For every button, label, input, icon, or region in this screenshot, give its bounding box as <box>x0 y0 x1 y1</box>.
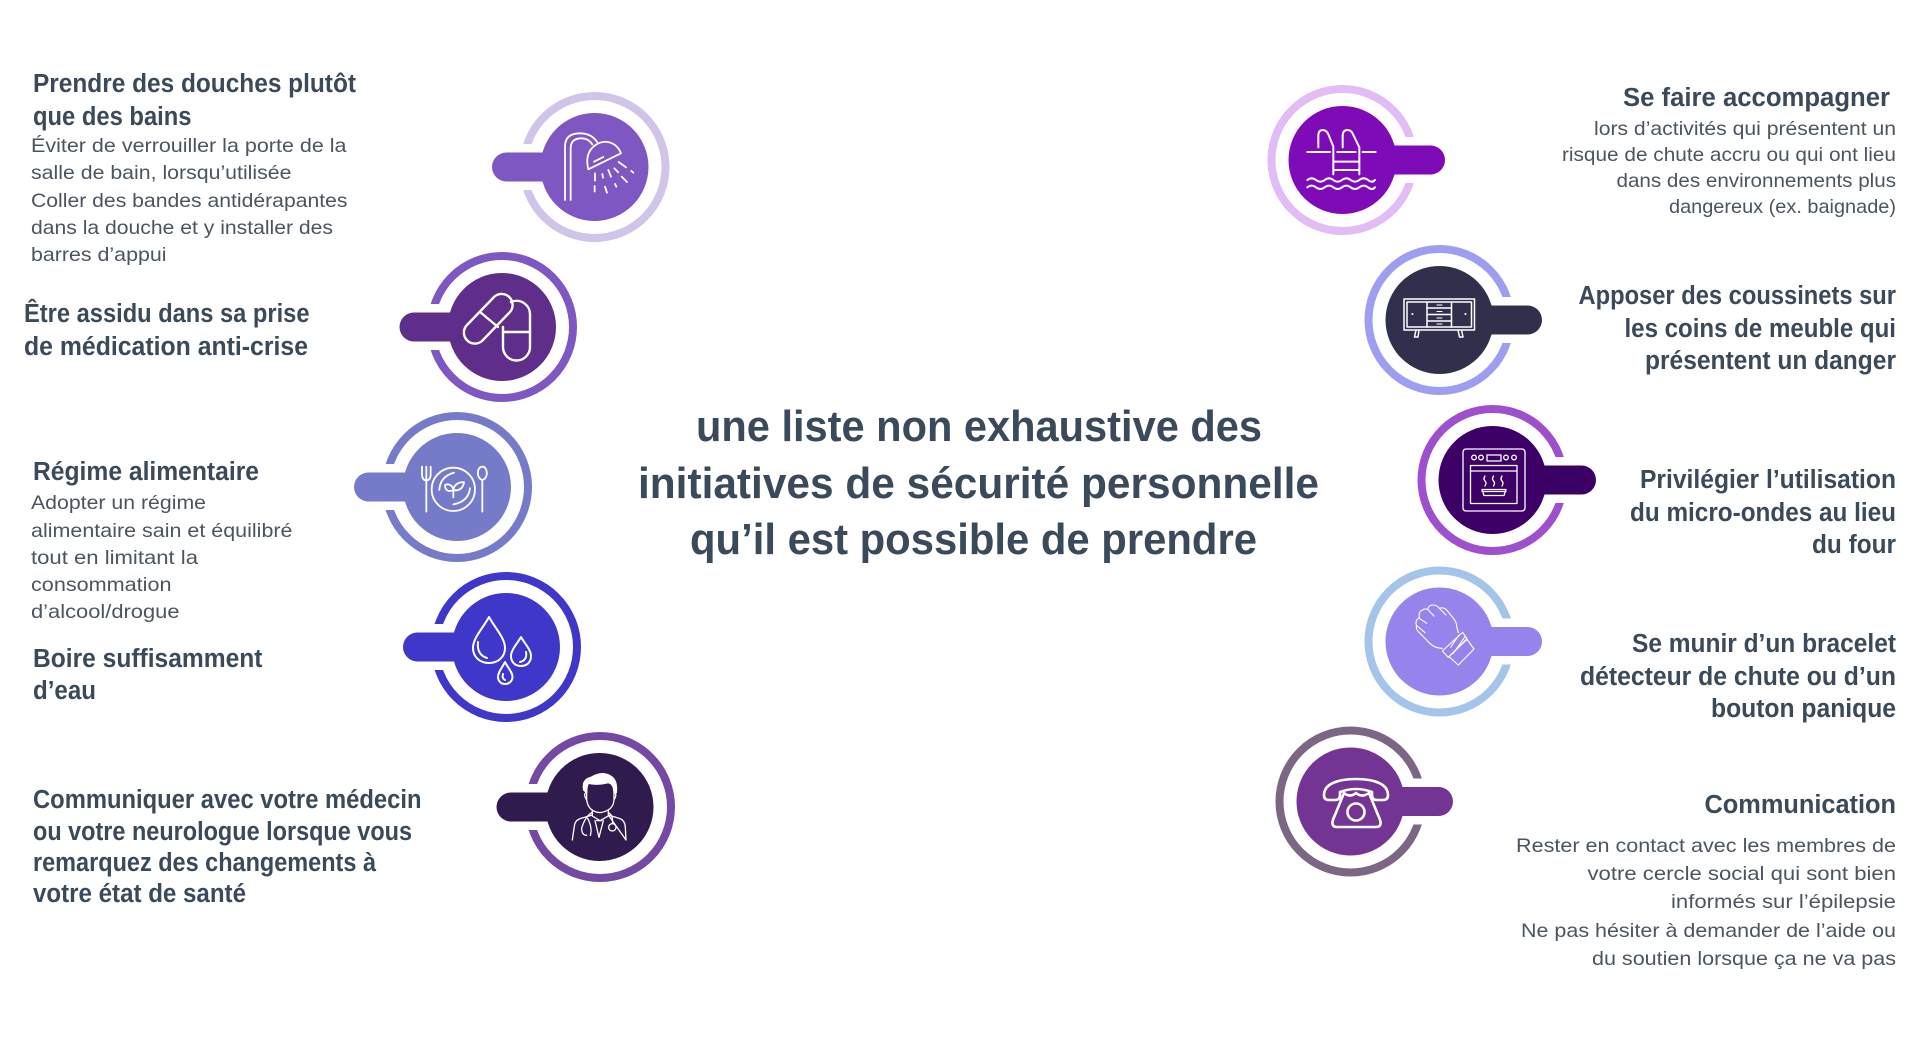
text block: accompagner: lors d’activités qui présentent un <box>1594 118 1896 140</box>
text block: douches: que des bains <box>33 103 192 131</box>
text block: micro-ondes: Privilégier l’utilisation <box>1640 466 1896 494</box>
text block: douches: Éviter de verrouiller la porte de la <box>31 134 347 157</box>
text block: régime alimentaire: alimentaire sain et équilibré <box>31 520 292 542</box>
title: qu’il est possible de prendre <box>690 515 1257 564</box>
panel: régime alimentaire <box>31 416 528 623</box>
icon badge: médication <box>400 256 573 398</box>
icon badge: médecin <box>496 736 671 878</box>
icon: oven <box>1463 449 1525 511</box>
icon: doctor <box>572 774 626 840</box>
text block: accompagner: risque de chute accru ou qui ont lieu <box>1562 144 1896 166</box>
text block: médecin: Communiquer avec votre médecin <box>33 786 422 814</box>
panel: coussinets <box>1368 249 1896 391</box>
text block: eau: d’eau <box>33 677 96 705</box>
text block: régime alimentaire: d’alcool/drogue <box>31 601 180 623</box>
icon: plate <box>422 467 487 512</box>
text block: régime alimentaire: tout en limitant la <box>31 547 198 569</box>
text block: régime alimentaire: Adopter un régime <box>31 492 206 514</box>
text block: coussinets: Apposer des coussinets sur <box>1578 282 1896 310</box>
text block: micro-ondes: du micro-ondes au lieu <box>1630 499 1896 527</box>
text block: coussinets <box>1578 282 1896 375</box>
panel: accompagner <box>1272 84 1896 231</box>
text block: médication: Être assidu dans sa prise <box>24 298 310 328</box>
text block: bracelet: détecteur de chute ou d’un <box>1580 663 1896 691</box>
text block: douches: barres d’appui <box>31 244 166 266</box>
text block: accompagner: Se faire accompagner <box>1623 84 1890 112</box>
icon: pills <box>464 294 530 360</box>
text block: médecin: votre état de santé <box>33 880 246 908</box>
text block: médication <box>24 298 310 361</box>
text block: douches: dans la douche et y installer des <box>31 217 333 239</box>
text block: eau: Boire suffisamment <box>33 645 263 673</box>
icon badge: four <box>1422 409 1596 551</box>
text block: accompagner <box>1562 84 1896 218</box>
text block: douches: salle de bain, lorsqu’utilisée <box>31 162 292 184</box>
text block: médecin: remarquez des changements à <box>33 849 377 877</box>
icon: telephone <box>1324 779 1388 827</box>
title: initiatives de sécurité personnelle <box>638 459 1319 508</box>
text block: douches: Coller des bandes antidérapantes <box>31 190 348 212</box>
text block: communication: votre cercle social qui sont bien <box>1588 863 1896 885</box>
title: une liste non exhaustive des <box>696 402 1262 451</box>
icon badge: eau <box>403 576 577 718</box>
text block: communication: du soutien lorsque ça ne va pas <box>1592 948 1896 970</box>
icon badge: bracelet <box>1368 570 1542 712</box>
icon: water drops <box>473 617 531 684</box>
icon badge: téléphone <box>1280 730 1453 872</box>
text block: coussinets: présentent un danger <box>1645 347 1896 375</box>
icon: shower <box>565 133 633 200</box>
text block: douches: Prendre des douches plutôt <box>33 70 356 98</box>
title <box>638 402 1319 564</box>
text block: coussinets: les coins de meuble qui <box>1624 315 1896 343</box>
text block: médication: de médication anti-crise <box>24 333 308 361</box>
text block: bracelet <box>1580 630 1896 723</box>
icon: pool ladder <box>1307 130 1376 189</box>
text block: communication: Rester en contact avec les membres de <box>1516 835 1896 857</box>
text block: bracelet: Se munir d’un bracelet <box>1632 630 1896 658</box>
text block: régime alimentaire: Régime alimentaire <box>33 458 259 486</box>
icon badge: douche <box>492 96 666 238</box>
icon: wrist with bracelet <box>1416 605 1474 665</box>
text block: douches <box>31 70 356 266</box>
panel: eau <box>33 576 577 718</box>
text block: communication: Communication <box>1704 791 1896 819</box>
text block: communication <box>1516 791 1896 970</box>
text block: médecin <box>33 786 422 908</box>
icon: sideboard <box>1404 299 1474 337</box>
text block: micro-ondes <box>1630 466 1896 559</box>
panel: communication <box>1280 730 1896 970</box>
icon badge: régime <box>354 416 528 558</box>
text block: accompagner: dans des environnements plus <box>1616 170 1896 192</box>
text block: micro-ondes: du four <box>1812 531 1896 559</box>
panel: médication <box>24 256 573 398</box>
text block: accompagner: dangereux (ex. baignade) <box>1669 196 1896 218</box>
text block: communication: Ne pas hésiter à demander de l’aide ou <box>1521 920 1896 942</box>
icon badge: meuble <box>1368 249 1542 391</box>
panel: micro-ondes <box>1422 409 1896 559</box>
text block: bracelet: bouton panique <box>1711 695 1896 723</box>
text block: médecin: ou votre neurologue lorsque vous <box>33 818 412 846</box>
panel: douches <box>31 70 666 266</box>
panel: médecin <box>33 736 671 908</box>
text block: régime alimentaire <box>31 458 292 623</box>
text block: régime alimentaire: consommation <box>31 574 172 596</box>
text block: communication: informés sur l’épilepsie <box>1671 891 1896 913</box>
panel: bracelet <box>1368 570 1896 723</box>
icon badge: piscine <box>1272 89 1445 231</box>
text block: eau <box>33 645 263 705</box>
